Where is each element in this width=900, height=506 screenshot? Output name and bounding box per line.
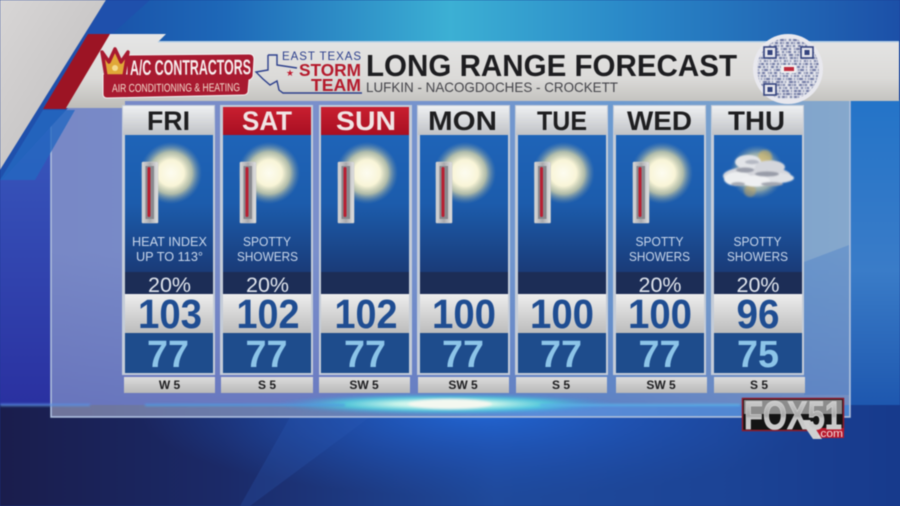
high temperature: 102 [334, 291, 398, 337]
low temperature [420, 333, 508, 376]
icon: sun and thermometer [434, 142, 496, 223]
precipitation chance [223, 272, 311, 297]
station logo: East Texas Storm Team [256, 51, 362, 95]
day header [712, 106, 803, 136]
precipitation chance [125, 272, 213, 297]
sponsor tagline: AIR CONDITIONING & HEATING [112, 82, 240, 95]
low temperature [223, 333, 311, 376]
forecast note: HEAT INDEX [132, 234, 207, 249]
icon: sun and thermometer [238, 142, 300, 223]
title bar [66, 34, 899, 108]
precipitation band [321, 272, 409, 294]
precipitation chance: 20% [148, 274, 191, 297]
column: Saturday [220, 105, 313, 393]
wind: S 5 [552, 378, 570, 392]
day header: TUE [537, 106, 587, 136]
precipitation chance: 20% [638, 274, 682, 297]
wind: SW 5 [448, 378, 478, 392]
day header: THU [728, 106, 785, 136]
wind [124, 377, 215, 393]
title: LONG RANGE FORECAST [366, 49, 737, 83]
column: Friday [122, 105, 215, 393]
wind: SW 5 [646, 378, 676, 392]
low temperature [321, 333, 409, 376]
sponsor name: A/C CONTRACTORS [130, 56, 251, 80]
day header: SUN [336, 106, 396, 136]
logo text east texas: EAST TEXAS [282, 51, 361, 63]
column: Wednesday [613, 105, 707, 393]
icon: star: ★ [286, 69, 294, 79]
wind: SW 5 [349, 378, 379, 392]
high temperature: 103 [138, 291, 202, 337]
precipitation chance [714, 272, 802, 297]
forecast note: SHOWERS [629, 249, 690, 264]
forecast note: SHOWERS [237, 249, 298, 264]
precipitation band [420, 272, 508, 294]
icon: Texas outline [256, 55, 362, 93]
day header: FRI [147, 106, 190, 136]
logo: FOX51: FOX51 [744, 394, 842, 438]
icon: sun and thermometer [532, 142, 594, 223]
day header: MON [428, 106, 497, 136]
wind [714, 377, 805, 393]
wind [221, 377, 313, 393]
column: Monday [417, 105, 510, 393]
wind: S 5 [750, 378, 768, 392]
logo text storm: STORM [299, 60, 361, 80]
low temperature: 77 [540, 334, 582, 376]
wind [516, 377, 607, 393]
icon: crown [102, 49, 128, 76]
day header [223, 106, 311, 136]
subtitle: LUFKIN - NACOGDOCHES - CROCKETT [366, 79, 618, 95]
precipitation chance: 20% [246, 274, 289, 297]
icon: sun and thermometer [336, 142, 398, 223]
high temperature: 102 [236, 291, 300, 337]
precipitation chance [616, 272, 704, 297]
day header [321, 106, 409, 136]
wind [418, 377, 509, 393]
day header [418, 106, 509, 136]
forecast note: SPOTTY [734, 234, 782, 249]
icon: sun and thermometer [140, 142, 202, 223]
logo text team: TEAM [311, 75, 361, 95]
high temperature: 96 [736, 291, 780, 337]
column: Thursday [711, 105, 805, 393]
low temperature [125, 333, 213, 376]
day header: WED [627, 106, 692, 136]
day header: SAT [242, 106, 292, 136]
low temperature: 77 [344, 334, 386, 376]
forecast note: SPOTTY [636, 234, 684, 249]
low temperature: 77 [147, 334, 189, 376]
forecast note [132, 234, 207, 264]
horizon glow [0, 393, 740, 415]
low temperature: 77 [246, 334, 288, 376]
column: Tuesday [515, 105, 608, 393]
icon: sun and thermometer [631, 142, 693, 223]
high temperature: 100 [628, 291, 692, 337]
column: Sunday [319, 105, 412, 393]
forecast note [727, 234, 788, 264]
high temperature: 100 [530, 291, 594, 337]
low temperature [518, 333, 606, 376]
precipitation band [518, 272, 606, 294]
low temperature: 77 [638, 334, 680, 376]
forecast note [629, 234, 690, 264]
low temperature [616, 333, 704, 376]
logo: FOX51: .com [817, 428, 843, 440]
day header [516, 106, 607, 136]
high temperature: 100 [432, 291, 496, 337]
sponsor logo: A/C Contractors [102, 49, 254, 98]
icon: QR code [750, 34, 826, 104]
panel: translucent backdrop [51, 100, 850, 417]
wind [616, 377, 707, 393]
corner graphic [0, 0, 150, 180]
icon: cloud and sun [723, 145, 794, 199]
forecast note [237, 234, 298, 264]
day header [614, 106, 705, 136]
wind: W 5 [159, 378, 180, 392]
day header [123, 106, 214, 136]
forecast note: SPOTTY [243, 234, 291, 249]
high temperature [714, 291, 802, 337]
wind [319, 377, 410, 393]
low temperature: 75 [737, 334, 779, 376]
low temperature [714, 333, 802, 376]
wind: S 5 [258, 378, 276, 392]
low temperature: 77 [442, 334, 484, 376]
forecast note: SHOWERS [727, 249, 788, 264]
forecast note: UP TO 113° [136, 249, 203, 264]
precipitation chance: 20% [736, 274, 780, 297]
